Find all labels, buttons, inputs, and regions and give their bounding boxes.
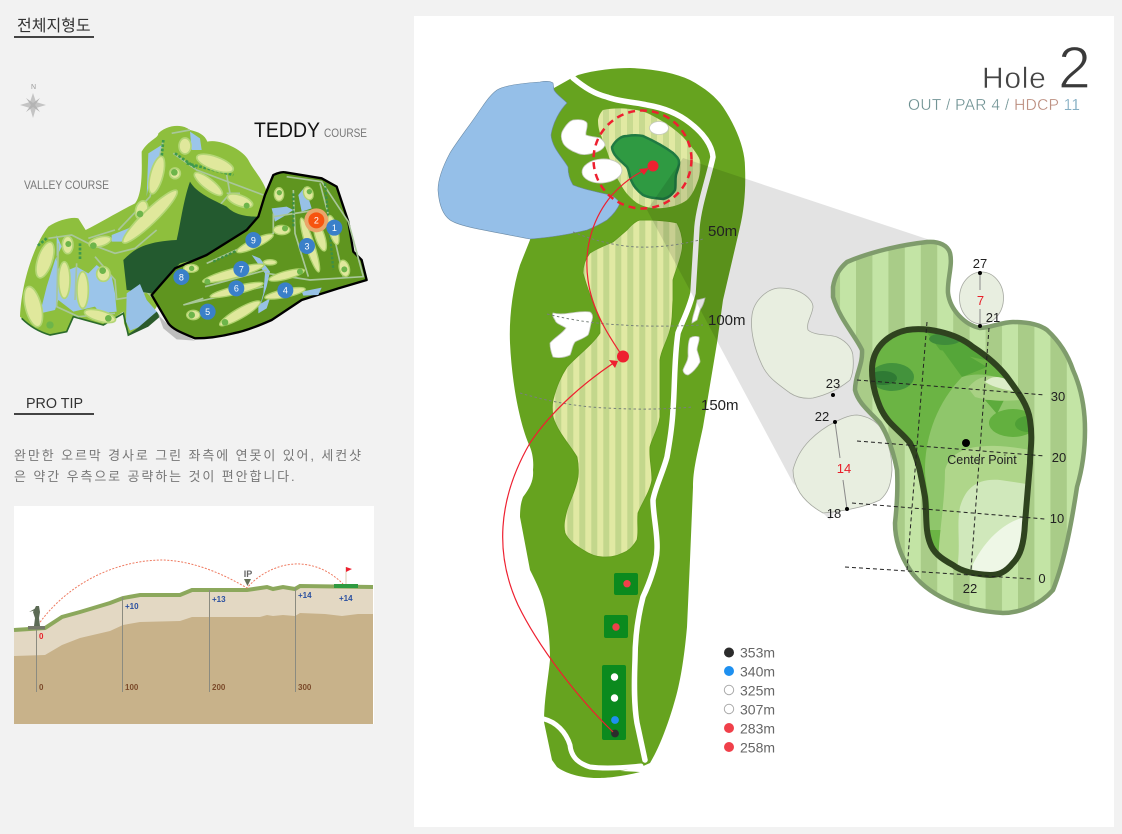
putting surface contours	[875, 332, 1028, 572]
tee legend: 283m	[740, 720, 775, 736]
elevation labels: +13	[212, 595, 226, 604]
elevation labels	[39, 591, 353, 641]
lake	[438, 81, 620, 239]
hole markers: 5	[205, 307, 210, 317]
measure lines	[845, 322, 1045, 579]
tee legend: 325m	[740, 682, 775, 698]
heading: pro tip	[14, 395, 94, 415]
shot trajectory	[503, 110, 692, 732]
pro tip text	[14, 448, 363, 484]
elevation labels: +14	[298, 591, 312, 600]
green measurements: 22	[963, 581, 977, 596]
distance labels: 50m	[708, 223, 737, 240]
green measurements: 27	[973, 256, 987, 271]
distance labels: 100m	[708, 312, 746, 329]
title: 2	[1058, 35, 1091, 101]
green measurements: 10	[1050, 511, 1064, 526]
elevation profile chart	[14, 506, 374, 724]
hole markers: 2	[314, 216, 319, 226]
fairway	[552, 220, 682, 557]
tee legend: 258m	[740, 740, 775, 756]
hole map	[438, 68, 745, 778]
pro tip text: 완만한 오르막 경사로 그린 좌측에 연못이 있어, 세컨샷	[14, 448, 363, 463]
shot arcs	[38, 560, 343, 625]
green measurements: 20	[1052, 450, 1066, 465]
hole markers: 6	[234, 284, 239, 294]
lake	[126, 284, 158, 331]
subsoil layers	[14, 586, 373, 724]
tee legend	[724, 644, 775, 756]
hole markers: 8	[179, 272, 184, 282]
distance markers: 100	[125, 683, 139, 692]
projection wedge to green detail	[647, 158, 930, 520]
icon: compass: N	[31, 84, 36, 91]
tee legend: 307m	[740, 702, 775, 718]
main hole panel	[414, 16, 1114, 827]
distance labels	[701, 223, 746, 414]
elevation labels: +14	[339, 594, 353, 603]
teddy shadow	[128, 312, 195, 341]
green measurements: 23	[826, 376, 840, 391]
label: teddy course: TEDDY	[254, 119, 320, 142]
green apron	[598, 108, 700, 208]
hole markers: 9	[251, 235, 256, 245]
hole markers	[173, 208, 342, 320]
label: teddy course: COURSE	[324, 126, 367, 140]
bunkers	[550, 120, 705, 375]
distance markers: 300	[298, 683, 312, 692]
distance markers: 200	[212, 683, 226, 692]
tee legend: 340m	[740, 664, 775, 680]
detail bunkers	[751, 272, 1004, 513]
golfer and tee	[28, 606, 45, 630]
elevation labels: +10	[125, 602, 139, 611]
heading: overview map: 전체지형도	[17, 17, 91, 35]
hole markers: 1	[332, 223, 337, 233]
center point label: Center Point	[947, 453, 1017, 467]
IP marker: IP	[244, 569, 252, 579]
course map	[20, 126, 367, 341]
distance labels: 150m	[701, 397, 739, 414]
green measurements: 30	[1051, 389, 1065, 404]
pro tip text: 은 약간 우측으로 공략하는 것이 편안합니다.	[14, 469, 297, 484]
cart path	[544, 78, 713, 768]
tee boxes	[602, 573, 638, 740]
surface line	[14, 586, 373, 630]
hole markers: 4	[283, 286, 288, 296]
label: teddy course	[254, 119, 367, 142]
distance markers	[36, 588, 312, 692]
green	[612, 135, 679, 199]
hole markers: 7	[239, 264, 244, 274]
hole markers: 3	[304, 241, 309, 251]
points	[831, 271, 982, 511]
valley course terrain	[20, 126, 267, 335]
green measurements: 14	[837, 461, 851, 476]
teddy course terrain	[152, 172, 367, 338]
distance markers: 0	[39, 683, 44, 692]
label: valley course: VALLEY COURSE	[24, 180, 109, 192]
green detail	[751, 242, 1085, 613]
bunker width lines	[835, 273, 980, 509]
green and flag	[334, 567, 358, 588]
forest area	[123, 182, 260, 293]
rough	[510, 68, 745, 778]
tee legend: 353m	[740, 644, 775, 660]
title: Hole	[982, 62, 1046, 95]
IP marker	[244, 569, 252, 586]
putting surface outline	[872, 329, 1031, 575]
subtitle: OUT / PAR 4 / HDCP 11	[908, 97, 1080, 114]
elevation labels: 0	[39, 632, 44, 641]
target markers	[609, 160, 658, 368]
title	[982, 35, 1091, 101]
green measurements: 22	[815, 409, 829, 424]
heading: pro tip: PRO TIP	[26, 395, 83, 412]
green measurements: 0	[1038, 571, 1046, 586]
green measurements: 7	[977, 293, 984, 308]
green measurements	[815, 256, 1066, 596]
green measurements: 21	[986, 310, 1000, 325]
green complex surround	[833, 242, 1085, 613]
green measurements: 18	[827, 506, 841, 521]
icon: compass	[20, 84, 46, 118]
distance lines	[520, 232, 703, 409]
